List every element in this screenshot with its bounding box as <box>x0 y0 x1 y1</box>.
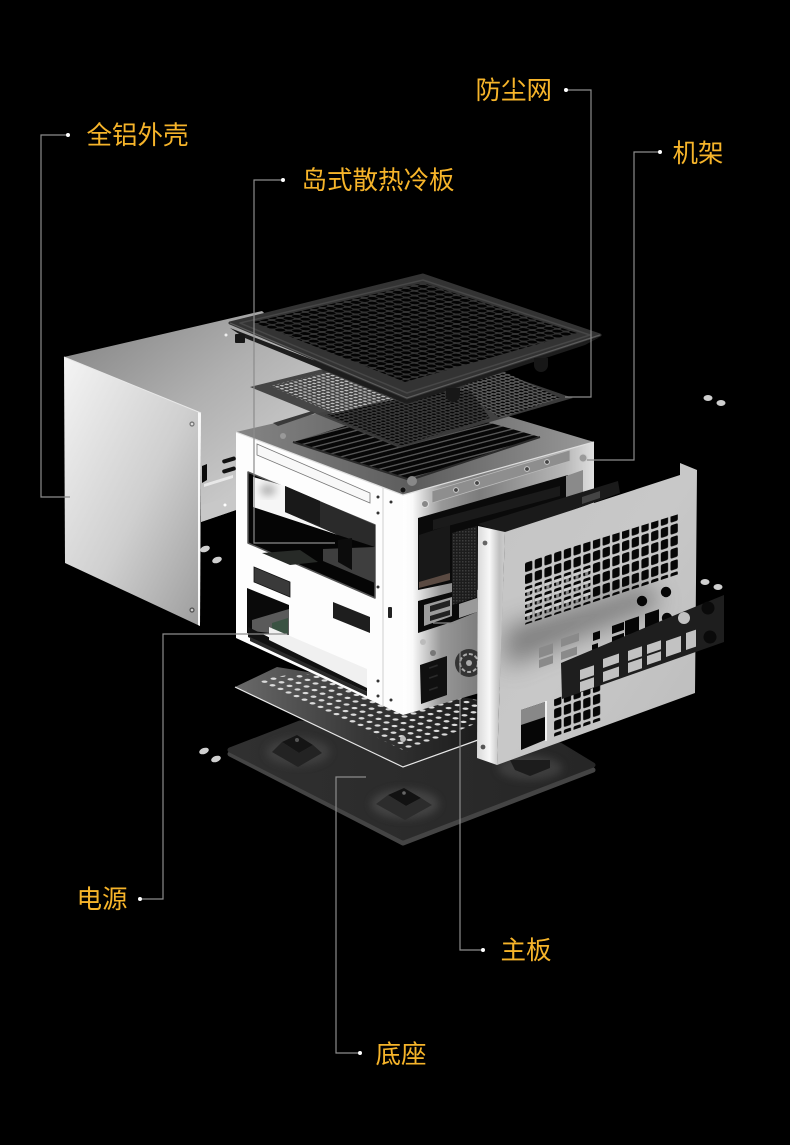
ports recess <box>418 585 477 633</box>
leader: base <box>336 777 366 1055</box>
foot front <box>371 788 439 820</box>
foot right <box>498 756 562 780</box>
shell: aluminium outer case <box>64 311 332 626</box>
board heatsink <box>452 526 477 605</box>
mesh holes right <box>460 365 560 418</box>
perforation <box>257 673 477 752</box>
grey column <box>566 470 583 500</box>
panel left bend column <box>477 526 505 765</box>
IEC socket <box>420 656 447 704</box>
IO panel <box>477 463 697 765</box>
heatsink fins <box>293 403 540 480</box>
panel main face <box>497 463 697 765</box>
lower vent <box>553 680 602 737</box>
small upper window <box>254 567 290 597</box>
lower left opening <box>521 701 546 750</box>
chassis right face <box>403 442 594 715</box>
dust filter frame <box>230 275 600 404</box>
mesh holes left <box>270 370 415 418</box>
io cutouts <box>592 587 672 650</box>
black PCB strip behind panel <box>478 481 620 535</box>
leader: motherboard <box>433 623 485 952</box>
right window interior <box>418 475 568 590</box>
label: aluminium shell: 全铝外壳 <box>86 122 189 150</box>
shell wall vents <box>202 334 236 506</box>
shell front side panel <box>64 357 201 626</box>
bottom mesh plate <box>235 667 480 767</box>
label: base: 底座 <box>376 1041 427 1069</box>
fan vent <box>455 649 483 677</box>
leader: dust filter <box>564 88 591 397</box>
label: dust filter: 防尘网 <box>476 77 552 105</box>
label: motherboard: 主板 <box>500 937 552 965</box>
grey bracket strip <box>432 450 570 503</box>
leader: shell <box>41 133 70 497</box>
foot left <box>266 735 330 767</box>
vent holes <box>524 514 679 625</box>
chassis top plate <box>236 390 594 508</box>
dust mesh plate <box>250 345 573 448</box>
chassis left white face <box>236 432 403 715</box>
lower slot <box>248 627 367 696</box>
IO shield bracket <box>561 595 724 699</box>
shell inner back wall <box>64 311 332 522</box>
USB ports <box>424 597 452 626</box>
leader: frame <box>587 150 662 460</box>
leader: cold plate <box>254 178 335 543</box>
label: island cold plate: 岛式散热冷板 <box>302 167 455 195</box>
filter grille <box>253 283 577 382</box>
leader: PSU <box>138 634 287 901</box>
bracket cutouts <box>580 612 696 692</box>
mesh holes centre <box>325 390 490 446</box>
HDMI port <box>459 598 477 618</box>
right port window <box>333 602 370 633</box>
base plate with feet <box>230 723 593 843</box>
label: frame: 机架 <box>672 140 724 168</box>
panel shade <box>505 583 660 668</box>
white bracket strip <box>257 444 370 503</box>
label: power supply: 电源 <box>76 886 128 914</box>
screws <box>198 395 725 764</box>
face screws <box>376 496 392 702</box>
chassis frame <box>236 390 594 715</box>
PSU opening <box>247 588 289 635</box>
filter clips <box>235 334 548 402</box>
large window <box>248 472 375 598</box>
